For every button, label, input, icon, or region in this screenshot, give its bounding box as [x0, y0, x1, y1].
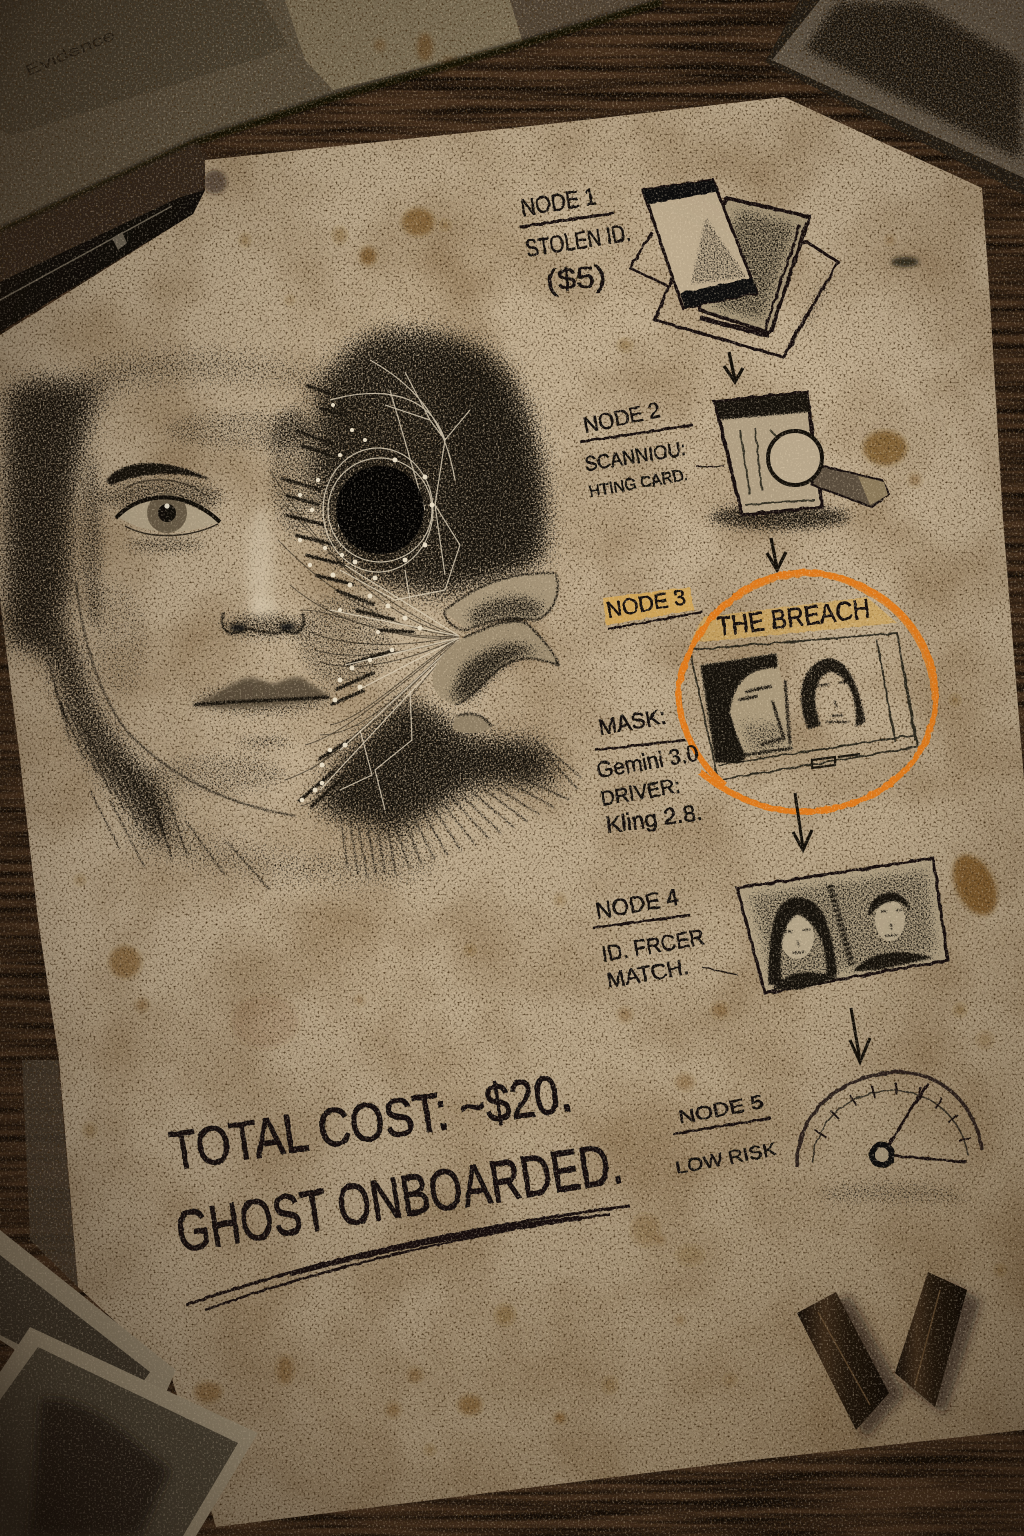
node 3 highlight label: NODE 3 [605, 584, 688, 623]
portrait: half-peeled face [0, 324, 582, 890]
man portrait [700, 653, 793, 763]
mask and driver notes: Kling 2.8. [604, 799, 704, 838]
video call screen sketch [690, 633, 918, 780]
bottom-left photographs [0, 1230, 258, 1536]
arrow: node 3 to node 4 [793, 793, 812, 850]
orange circle [679, 572, 936, 812]
woman portrait [801, 658, 866, 730]
icon: phone and stacked IDs [630, 180, 838, 357]
top-left evidence papers [0, 0, 662, 285]
portrait: nose [222, 508, 304, 633]
total cost line: TOTAL COST: ~$20. [166, 1063, 575, 1182]
paper stains [75, 170, 1006, 1455]
node 4 label: MATCH. [605, 954, 691, 993]
node 5 label [673, 1092, 778, 1178]
icon: ID card with two faces [737, 858, 948, 993]
portrait: soft skin shading [78, 400, 395, 797]
pen [0, 190, 205, 332]
evidence caption: Evidence [23, 27, 118, 80]
node 2 label: NODE 2 [581, 397, 662, 438]
node 4 label: NODE 4 [593, 884, 681, 924]
breach heading: THE BREACH [715, 593, 872, 642]
mask and driver notes [595, 703, 704, 838]
portrait: cheek fan lines [270, 470, 459, 806]
ghost onboarded line: GHOST ONBOARDED. [172, 1130, 626, 1265]
node 1 label [519, 183, 633, 298]
mask and driver notes: MASK: [597, 703, 668, 740]
portrait: left eye [106, 463, 220, 536]
node 2 label: HTING CARD. [588, 467, 689, 501]
arrow: node 1 to node 2 [724, 352, 743, 382]
portrait: jaw line [76, 580, 296, 816]
Node 2: scanning [580, 392, 889, 532]
arrow: node 2 to node 3 [767, 538, 786, 570]
spent bullet casings [797, 1272, 982, 1440]
portrait: mesh dots [298, 403, 434, 802]
portrait: lips [193, 677, 330, 708]
icon: magnifier over card [705, 392, 889, 532]
portrait: strand streaks [48, 660, 582, 890]
node 5 label: NODE 5 [677, 1092, 765, 1129]
node 4 label [593, 884, 738, 993]
portrait: hand pinching skin [432, 573, 559, 733]
node 2 label: SCANNIOU: [583, 438, 688, 476]
total cost conclusion [166, 1063, 630, 1310]
Node 1: stolen ID and phone [519, 180, 838, 357]
node 5 label: LOW RISK [674, 1139, 778, 1178]
Node 4: ID face match [593, 858, 948, 993]
node 1 label: ($5) [545, 260, 607, 298]
node 4 label: ID. FRCER [600, 924, 706, 967]
portrait: flap edge dabs [280, 385, 415, 808]
left under-sheet sliver [22, 1060, 78, 1287]
arrow: node 4 to node 5 [850, 1008, 870, 1062]
mask and driver notes: DRIVER: [599, 774, 682, 811]
node 2 label [580, 397, 724, 501]
portrait: exposed black socket [336, 466, 424, 554]
portrait: wire-mesh lines [320, 360, 470, 810]
underline swoosh [186, 1206, 630, 1310]
Node 3: the breach [595, 572, 936, 838]
node 1 label: NODE 1 [519, 183, 598, 222]
node 1 label: STOLEN ID. [524, 220, 633, 263]
icon: gauge [797, 1072, 982, 1205]
Node 5: low risk gauge [673, 1072, 982, 1205]
top-right photographs [765, 0, 1024, 195]
mask and driver notes: Gemini 3.0 [595, 740, 700, 783]
portrait: hair and shadow charcoal [0, 324, 570, 888]
